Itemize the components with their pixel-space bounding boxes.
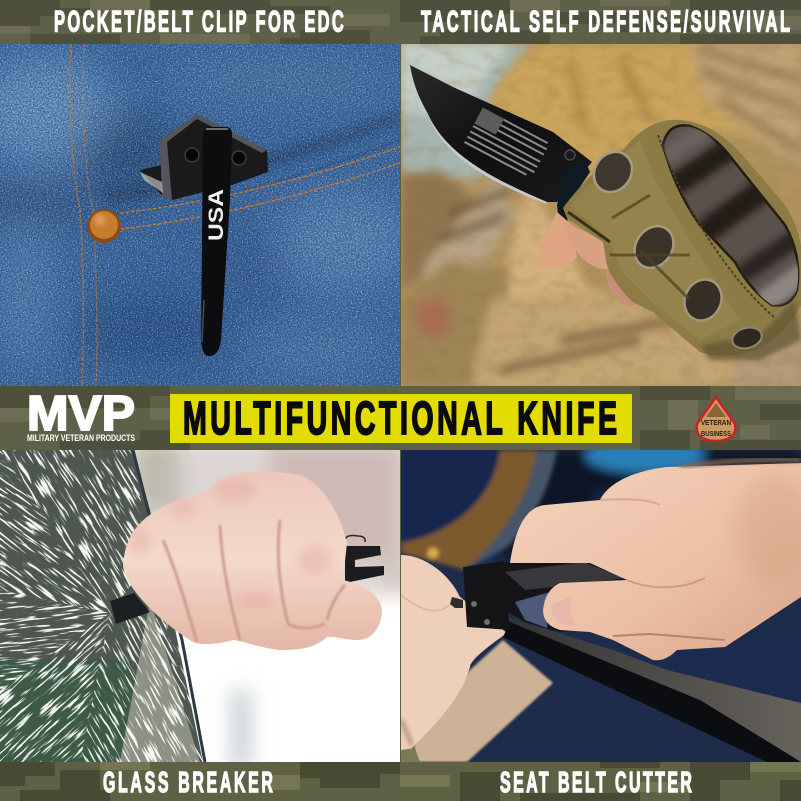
tan seat <box>410 640 553 762</box>
soldier arm and ground <box>401 170 801 386</box>
panel: glass breaker photo <box>0 440 420 770</box>
knife handle with glass tip <box>450 560 627 632</box>
icon: veteran owned business badge: BUSINESS <box>701 431 731 438</box>
denim texture <box>0 44 400 386</box>
pocket clip with USA: USA <box>205 189 228 241</box>
tool end behind fist <box>345 536 384 583</box>
panel: seat belt cutter photo <box>401 437 801 762</box>
knuckle holes <box>592 150 634 194</box>
sand grain <box>401 44 801 386</box>
MVP logo: MILITARY VETERAN PRODUCTS <box>27 433 135 443</box>
icon: veteran owned business badge: VETERAN <box>701 420 731 427</box>
denim shading <box>0 52 415 376</box>
panel: pocket/belt clip photo <box>0 44 415 386</box>
steering wheel ring <box>401 450 557 570</box>
knife handle in pocket <box>140 114 268 200</box>
pocket shadow and seam <box>100 112 400 205</box>
heading: tactical self defense: TACTICAL SELF DEFENSE/SURVIVAL <box>421 5 790 39</box>
thumb and fingers skin <box>539 212 640 306</box>
MVP logo: MVP <box>27 387 135 441</box>
pocket clip with USA <box>201 127 232 356</box>
blurred background top <box>134 450 400 762</box>
title banner: MULTIFUNCTIONAL KNIFE <box>183 393 617 445</box>
soldier torso <box>490 44 801 386</box>
heading: glass breaker: GLASS BREAKER <box>103 766 273 798</box>
tactical glove <box>563 120 801 360</box>
gripping hand <box>510 460 801 660</box>
fist <box>123 471 382 650</box>
knife blade with flag <box>410 65 592 235</box>
bottom camo banner <box>0 762 801 801</box>
icon: veteran owned business badge <box>697 397 735 441</box>
dark interior background <box>498 450 801 562</box>
heading: pocket belt clip: POCKET/BELT CLIP FOR EDC <box>54 5 344 39</box>
left forearm <box>401 555 507 762</box>
cracked window glass <box>0 450 205 762</box>
orange stitching <box>70 44 400 386</box>
icon: engraved flag <box>464 108 550 178</box>
top camo banner <box>0 0 801 44</box>
tool tip striking glass <box>110 593 150 624</box>
sky background <box>401 44 530 180</box>
knuckle guard <box>663 125 798 305</box>
middle camo banner <box>0 386 801 450</box>
panel: tactical self defense photo <box>401 44 801 386</box>
heading: seat belt cutter: SEAT BELT CUTTER <box>500 766 692 798</box>
icon: copper rivet <box>87 209 121 243</box>
seat belt <box>503 617 801 762</box>
